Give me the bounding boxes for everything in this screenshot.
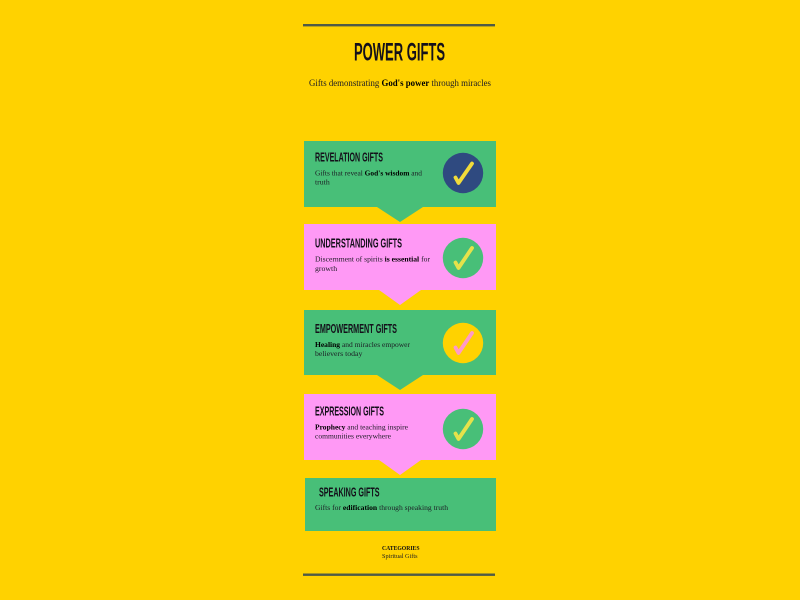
icon: check on navy circle [443,153,483,193]
icon: check on yellow circle [443,323,483,363]
heading: revelation gifts: REVELATION GIFTS [315,150,383,164]
footer: categories: CATEGORIES [382,545,420,552]
heading: speaking gifts: SPEAKING GIFTS [319,486,380,500]
heading: understanding gifts: UNDERSTANDING GIFTS [315,236,402,250]
description: understanding gifts: Discernment of spirits is essential for [315,254,430,264]
icon: check on green circle [443,409,483,449]
description: expression gifts: Prophecy and teaching inspire [315,422,409,432]
panel: empowerment gifts: believers today [315,349,363,358]
subtitle: Gifts demonstrating God's power through miracles [309,78,491,88]
panel: revelation gifts: truth [315,178,330,186]
panel: expression gifts: communities everywhere [315,432,392,440]
panel: speaking gifts [305,478,496,531]
title: POWER GIFTS [354,38,445,66]
footer: categories [382,545,420,560]
description: revelation gifts: Gifts that reveal God's wisdom and [315,168,422,178]
panel: empowerment gifts [304,310,496,390]
panel: understanding gifts: growth [315,264,337,273]
panel: revelation gifts [304,141,496,222]
footer: categories: Spiritual Gifts [382,553,418,560]
heading: empowerment gifts: EMPOWERMENT GIFTS [315,322,397,336]
heading: expression gifts: EXPRESSION GIFTS [315,404,384,418]
panel: understanding gifts [304,224,496,305]
icon: check on green circle [443,238,483,278]
description: empowerment gifts: Healing and miracles empower [315,340,410,349]
description: speaking gifts: Gifts for edification through speaking truth [315,503,448,512]
panel: expression gifts [304,394,496,475]
